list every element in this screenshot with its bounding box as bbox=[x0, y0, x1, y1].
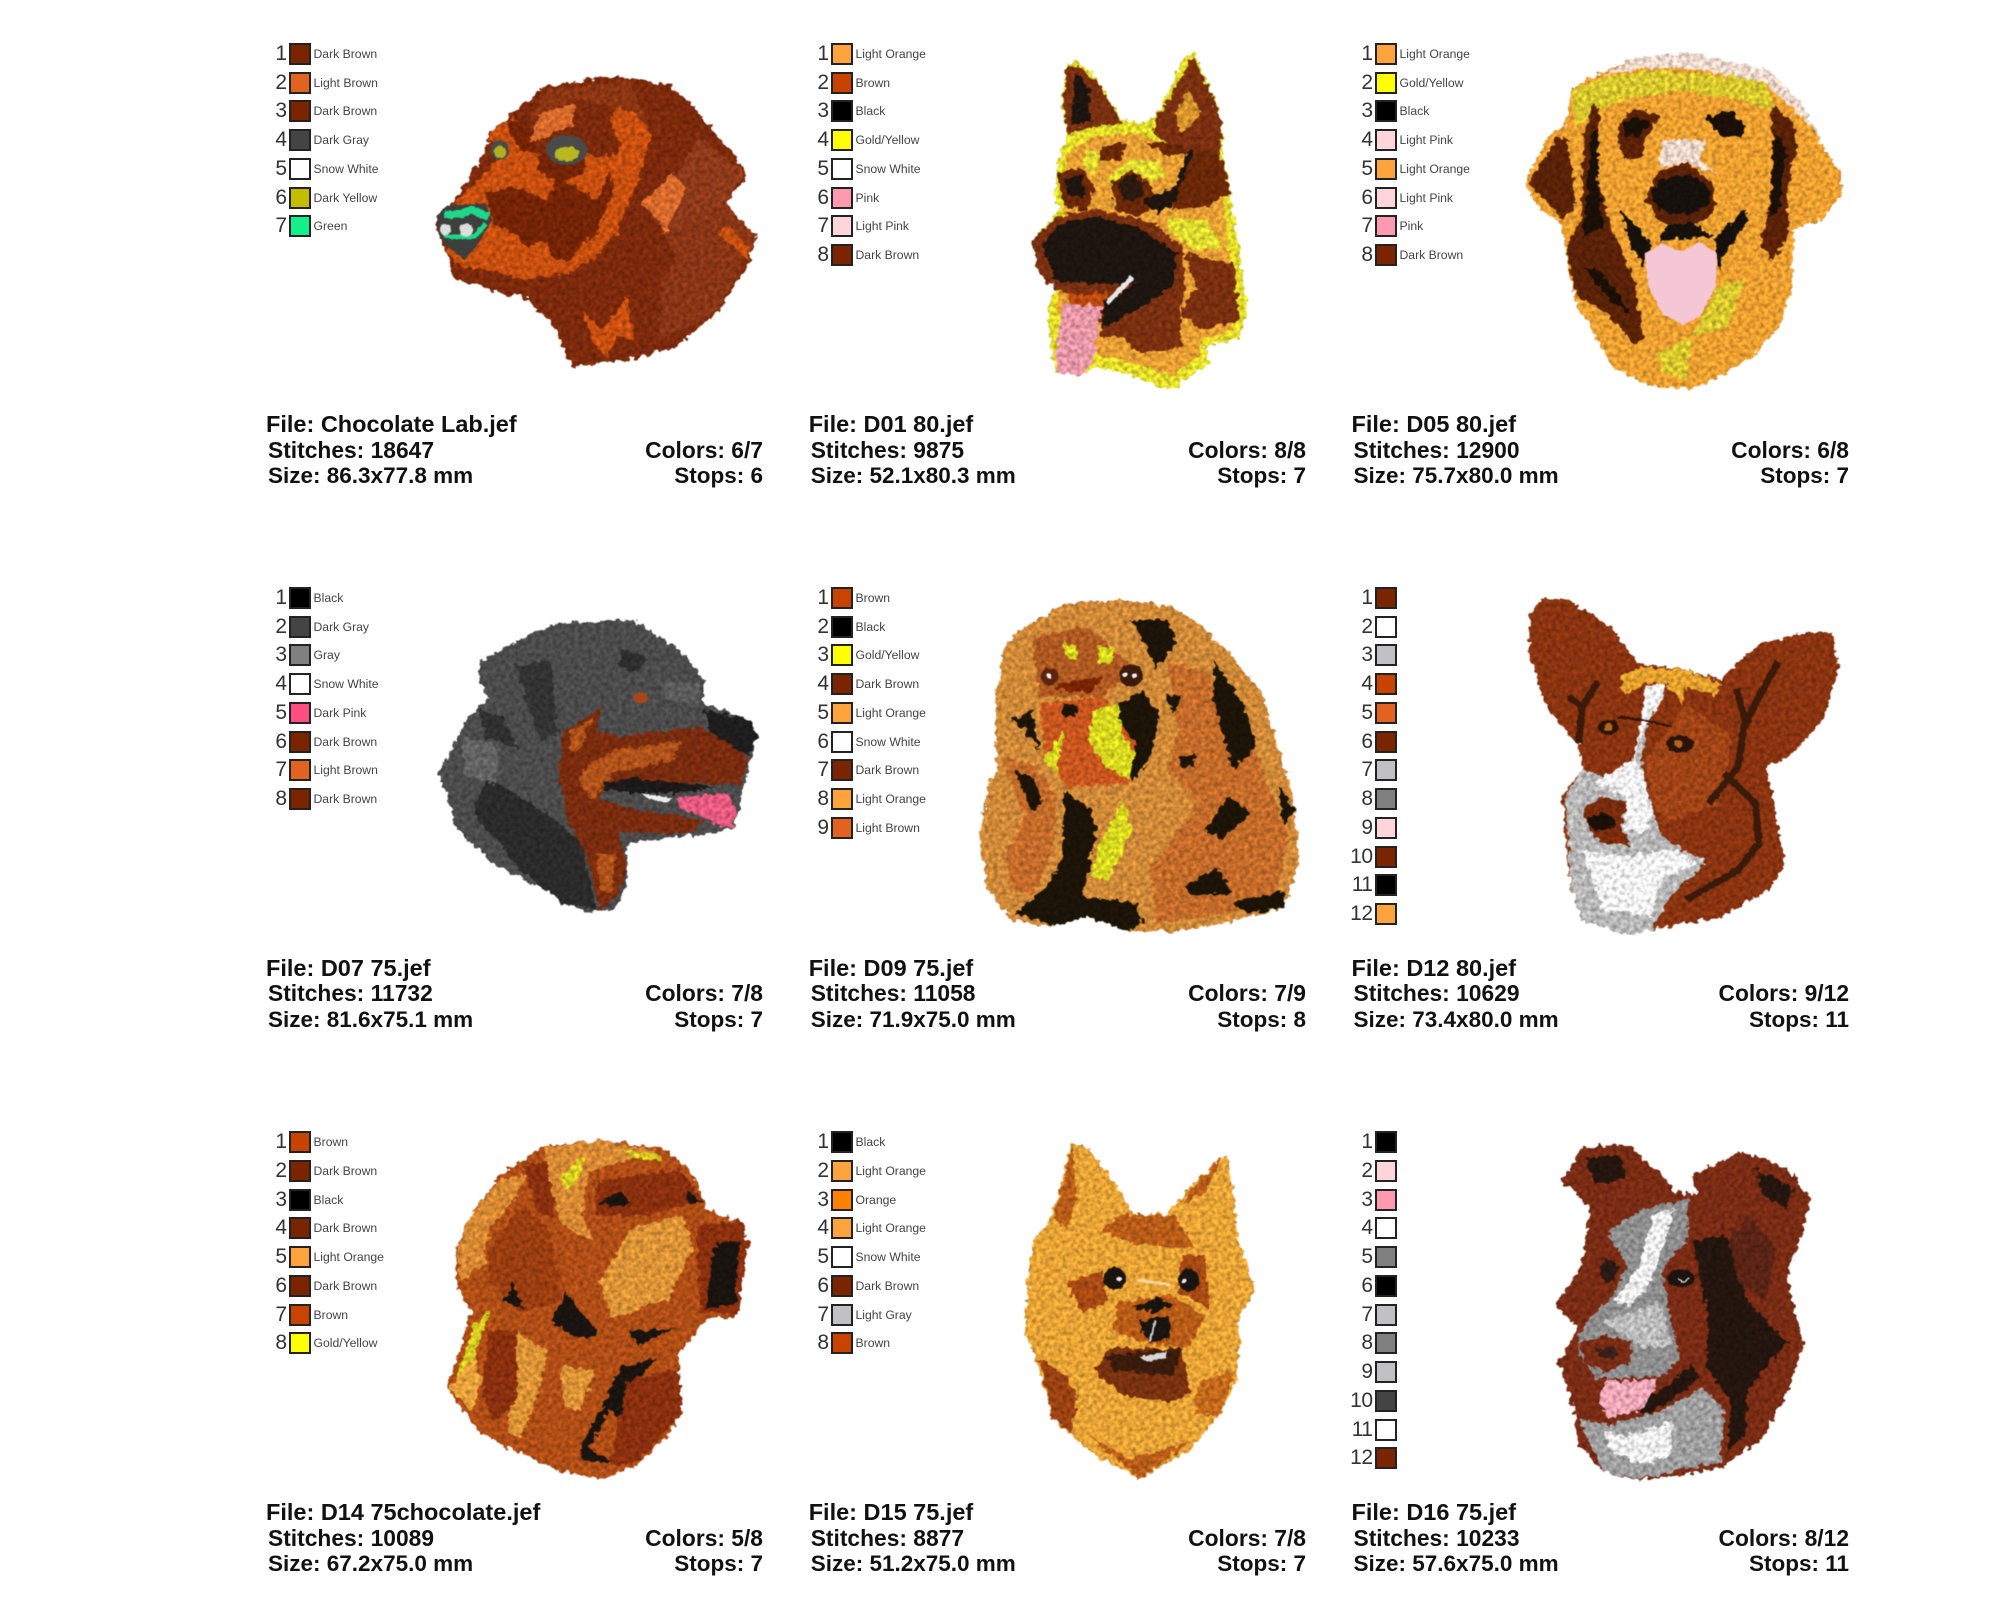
file stats: Stops: 7 bbox=[1217, 1551, 1306, 1576]
color legend: Black bbox=[314, 1193, 343, 1207]
color legend: Light Orange bbox=[856, 706, 926, 720]
color legend: Light Pink bbox=[1400, 191, 1453, 205]
file stats: File: Chocolate Lab.jef bbox=[266, 411, 517, 437]
color legend: Dark Brown bbox=[856, 763, 919, 777]
color legend: 6 bbox=[1361, 186, 1372, 209]
color legend: Gold/Yellow bbox=[1400, 76, 1463, 90]
color legend: Dark Brown bbox=[1400, 248, 1463, 262]
color legend: Gold/Yellow bbox=[314, 1336, 377, 1350]
color legend: Light Brown bbox=[314, 763, 378, 777]
color legend: Gold/Yellow bbox=[856, 133, 919, 147]
panel: D16 75 bbox=[1350, 1130, 1849, 1576]
color legend: 1 bbox=[1361, 586, 1372, 609]
embroidered dog: chocolate lab bbox=[434, 74, 758, 370]
color legend bbox=[817, 1130, 926, 1354]
color legend: Dark Brown bbox=[856, 677, 919, 691]
embroidered dog: spaniel bbox=[978, 598, 1300, 935]
color legend: 3 bbox=[275, 643, 286, 666]
file stats: Size: 51.2x75.0 mm bbox=[811, 1551, 1016, 1576]
color legend: 6 bbox=[817, 730, 828, 753]
file stats: Stitches: 11732 bbox=[268, 980, 433, 1006]
color legend: Dark Brown bbox=[856, 248, 919, 262]
color legend: 1 bbox=[817, 42, 828, 65]
embroidered dog: yorkshire terrier bbox=[1023, 1142, 1256, 1480]
color legend: Black bbox=[856, 104, 885, 118]
color legend: Black bbox=[856, 1135, 885, 1149]
color legend: 8 bbox=[817, 243, 828, 266]
color legend: Light Orange bbox=[856, 792, 926, 806]
color legend bbox=[1350, 1130, 1397, 1469]
color legend: Snow White bbox=[856, 1250, 921, 1264]
file stats: File: D12 80.jef bbox=[1352, 955, 1516, 981]
color legend: 4 bbox=[817, 1216, 828, 1239]
file stats: Colors: 6/8 bbox=[1731, 437, 1849, 463]
color legend bbox=[275, 1130, 384, 1354]
color legend: 7 bbox=[817, 214, 828, 237]
color legend: Light Orange bbox=[856, 47, 926, 61]
color legend: 7 bbox=[1361, 214, 1372, 237]
file stats: File: D09 75.jef bbox=[809, 955, 973, 981]
color legend: Dark Brown bbox=[314, 47, 377, 61]
color legend: Black bbox=[1400, 104, 1429, 118]
icon: eyes and nose bbox=[437, 135, 588, 260]
file stats: Colors: 8/8 bbox=[1188, 437, 1306, 463]
color legend: Dark Gray bbox=[314, 620, 369, 634]
file stats: Stitches: 10089 bbox=[268, 1525, 434, 1551]
panel: D09 75 bbox=[809, 586, 1306, 1032]
color legend: 4 bbox=[817, 128, 828, 151]
color legend: 6 bbox=[275, 730, 286, 753]
file stats: Size: 73.4x80.0 mm bbox=[1354, 1007, 1559, 1032]
file stats bbox=[266, 1499, 763, 1576]
file stats bbox=[266, 411, 763, 488]
file stats: Stitches: 9875 bbox=[811, 437, 964, 463]
file stats: File: D15 75.jef bbox=[809, 1499, 973, 1525]
color legend: 4 bbox=[1361, 672, 1372, 695]
color legend: 3 bbox=[817, 643, 828, 666]
color legend: 6 bbox=[817, 1274, 828, 1297]
icon: teeth bbox=[1107, 277, 1133, 303]
file stats: File: D05 80.jef bbox=[1352, 411, 1516, 437]
color legend: Dark Brown bbox=[314, 104, 377, 118]
file stats: Colors: 8/12 bbox=[1718, 1525, 1849, 1551]
icon: fur markings bbox=[1568, 662, 1778, 900]
color legend: Light Gray bbox=[856, 1308, 912, 1322]
file stats: Colors: 7/8 bbox=[645, 980, 763, 1006]
color legend: 10 bbox=[1350, 1389, 1372, 1412]
icon: tongue bbox=[1645, 242, 1717, 325]
color legend: Dark Brown bbox=[314, 792, 377, 806]
color legend bbox=[817, 586, 926, 839]
color legend: Gold/Yellow bbox=[856, 648, 919, 662]
file stats: Size: 75.7x80.0 mm bbox=[1354, 463, 1559, 488]
color legend: Snow White bbox=[856, 162, 921, 176]
color legend: Light Orange bbox=[1400, 162, 1470, 176]
color legend: Light Brown bbox=[856, 821, 920, 835]
file stats: Stitches: 10629 bbox=[1354, 980, 1520, 1006]
color legend: Light Orange bbox=[314, 1250, 384, 1264]
color legend: Gray bbox=[314, 648, 340, 662]
file stats: Stops: 11 bbox=[1749, 1551, 1849, 1576]
color legend: Dark Brown bbox=[314, 1279, 377, 1293]
color legend: 6 bbox=[1361, 1274, 1372, 1297]
color legend: 8 bbox=[275, 787, 286, 810]
color legend: 2 bbox=[275, 615, 286, 638]
color legend: 10 bbox=[1350, 845, 1372, 868]
file stats: Stops: 7 bbox=[1217, 463, 1306, 488]
file stats: Stops: 6 bbox=[674, 463, 763, 488]
file stats: Size: 86.3x77.8 mm bbox=[268, 463, 473, 488]
embroidered dog: border collie bbox=[1555, 1142, 1812, 1482]
file stats: Stops: 7 bbox=[1760, 463, 1849, 488]
color legend: Dark Brown bbox=[856, 1279, 919, 1293]
color legend: 8 bbox=[1361, 243, 1372, 266]
color legend: 3 bbox=[817, 99, 828, 122]
file stats: Stops: 8 bbox=[1217, 1007, 1306, 1032]
color legend: 8 bbox=[1361, 787, 1372, 810]
color legend: 5 bbox=[1361, 701, 1372, 724]
color legend: 2 bbox=[817, 615, 828, 638]
color legend: 1 bbox=[817, 586, 828, 609]
color legend: Dark Brown bbox=[314, 1221, 377, 1235]
file stats: Stitches: 18647 bbox=[268, 437, 434, 463]
embroidered dog: rottweiler bbox=[436, 618, 760, 914]
panel: D05 80 bbox=[1352, 42, 1849, 488]
color legend: 5 bbox=[817, 1245, 828, 1268]
file stats: Size: 81.6x75.1 mm bbox=[268, 1007, 473, 1032]
color legend: 9 bbox=[1361, 816, 1372, 839]
icon: eyes bbox=[1598, 717, 1694, 753]
icon: eyes bbox=[1041, 664, 1143, 687]
file stats: Stops: 7 bbox=[674, 1551, 763, 1576]
color legend bbox=[275, 42, 379, 237]
color legend: Black bbox=[856, 620, 885, 634]
color legend: Light Pink bbox=[1400, 133, 1453, 147]
color legend: 7 bbox=[275, 214, 286, 237]
color legend: 3 bbox=[1361, 643, 1372, 666]
color legend: 9 bbox=[817, 816, 828, 839]
color legend: 3 bbox=[275, 1188, 286, 1211]
color legend: 2 bbox=[275, 1159, 286, 1182]
color legend: 1 bbox=[275, 42, 286, 65]
color legend bbox=[275, 586, 379, 810]
file stats: Size: 71.9x75.0 mm bbox=[811, 1007, 1016, 1032]
color legend: 8 bbox=[275, 1331, 286, 1354]
color legend: 2 bbox=[275, 71, 286, 94]
color legend: 2 bbox=[817, 71, 828, 94]
color legend: 12 bbox=[1350, 1446, 1372, 1469]
file stats bbox=[1352, 1499, 1849, 1576]
color legend bbox=[817, 42, 926, 266]
color legend: 7 bbox=[275, 758, 286, 781]
color legend: 5 bbox=[817, 701, 828, 724]
color legend: 6 bbox=[275, 1274, 286, 1297]
file stats bbox=[266, 955, 763, 1032]
color legend: 5 bbox=[275, 701, 286, 724]
file stats: Colors: 6/7 bbox=[645, 437, 763, 463]
color legend: 4 bbox=[275, 128, 286, 151]
color legend: 8 bbox=[1361, 1331, 1372, 1354]
file stats: File: D01 80.jef bbox=[809, 411, 973, 437]
color legend: 1 bbox=[1361, 42, 1372, 65]
color legend: 12 bbox=[1350, 902, 1372, 925]
file stats bbox=[1352, 955, 1849, 1032]
panel: Chocolate Lab bbox=[266, 42, 763, 488]
color legend: Brown bbox=[314, 1135, 348, 1149]
file stats: File: D07 75.jef bbox=[266, 955, 431, 981]
file stats: Stops: 11 bbox=[1749, 1007, 1849, 1032]
color legend: Brown bbox=[314, 1308, 348, 1322]
color legend bbox=[1361, 42, 1470, 266]
color legend: 4 bbox=[817, 672, 828, 695]
color legend: Snow White bbox=[856, 735, 921, 749]
color legend: Snow White bbox=[314, 677, 379, 691]
color legend: 1 bbox=[1361, 1130, 1372, 1153]
file stats: Stitches: 12900 bbox=[1354, 437, 1520, 463]
color legend: 8 bbox=[817, 1331, 828, 1354]
color legend: Dark Yellow bbox=[314, 191, 377, 205]
color legend: Pink bbox=[856, 191, 879, 205]
file stats: Size: 67.2x75.0 mm bbox=[268, 1551, 473, 1576]
color legend: Light Orange bbox=[856, 1221, 926, 1235]
file stats bbox=[809, 1499, 1306, 1576]
file stats: Colors: 7/8 bbox=[1188, 1525, 1306, 1551]
embroidered dog: golden retriever bbox=[1525, 52, 1844, 392]
color legend: Light Brown bbox=[314, 76, 378, 90]
embroidered dog: corgi bbox=[1526, 596, 1841, 936]
file stats: Stitches: 8877 bbox=[811, 1525, 964, 1551]
color legend: 1 bbox=[817, 1130, 828, 1153]
color legend: 1 bbox=[275, 1130, 286, 1153]
file stats: Colors: 5/8 bbox=[645, 1525, 763, 1551]
color legend: 3 bbox=[817, 1188, 828, 1211]
color legend: 5 bbox=[1361, 1245, 1372, 1268]
color legend: 8 bbox=[817, 787, 828, 810]
color legend: 5 bbox=[817, 157, 828, 180]
icon: teeth and eye bbox=[633, 693, 672, 803]
color legend: 5 bbox=[1361, 157, 1372, 180]
color legend: Dark Pink bbox=[314, 706, 366, 720]
file stats: Stops: 7 bbox=[674, 1007, 763, 1032]
file stats: Colors: 7/9 bbox=[1188, 980, 1306, 1006]
color legend: 3 bbox=[1361, 1188, 1372, 1211]
color legend: 5 bbox=[275, 157, 286, 180]
color legend: Brown bbox=[856, 1336, 890, 1350]
file stats: Size: 57.6x75.0 mm bbox=[1354, 1551, 1559, 1576]
panel: D14 75chocolate bbox=[266, 1130, 763, 1576]
color legend: 2 bbox=[1361, 615, 1372, 638]
color legend bbox=[1350, 586, 1397, 925]
color legend: Dark Brown bbox=[314, 735, 377, 749]
color legend: Dark Gray bbox=[314, 133, 369, 147]
color legend: 2 bbox=[1361, 71, 1372, 94]
color legend: 7 bbox=[1361, 758, 1372, 781]
color legend: 9 bbox=[1361, 1360, 1372, 1383]
color legend: 7 bbox=[275, 1303, 286, 1326]
icon: eye bbox=[1667, 1270, 1695, 1287]
color legend: Light Orange bbox=[1400, 47, 1470, 61]
file stats: Colors: 9/12 bbox=[1718, 980, 1849, 1006]
color legend: 6 bbox=[817, 186, 828, 209]
file stats: Stitches: 10233 bbox=[1354, 1525, 1520, 1551]
file stats: Stitches: 11058 bbox=[811, 980, 975, 1006]
color legend: Black bbox=[314, 591, 343, 605]
file stats: Size: 52.1x80.3 mm bbox=[811, 463, 1016, 488]
color legend: 7 bbox=[1361, 1303, 1372, 1326]
color legend: Brown bbox=[856, 591, 890, 605]
color legend: Light Pink bbox=[856, 219, 909, 233]
color legend: Green bbox=[314, 219, 347, 233]
color legend: 3 bbox=[275, 99, 286, 122]
color legend: Pink bbox=[1400, 219, 1423, 233]
panel: D01 80 bbox=[809, 42, 1306, 488]
color legend: 7 bbox=[817, 758, 828, 781]
panel: D15 75 bbox=[809, 1130, 1306, 1576]
color legend: 11 bbox=[1352, 873, 1372, 896]
file stats: File: D14 75chocolate.jef bbox=[266, 1499, 540, 1525]
color legend: 4 bbox=[1361, 1216, 1372, 1239]
color legend: 6 bbox=[1361, 730, 1372, 753]
color legend: 2 bbox=[1361, 1159, 1372, 1182]
color legend: 2 bbox=[817, 1159, 828, 1182]
panel: D07 75 bbox=[266, 586, 763, 1032]
color legend: Snow White bbox=[314, 162, 379, 176]
color legend: 6 bbox=[275, 186, 286, 209]
color legend: 4 bbox=[275, 672, 286, 695]
color legend: 11 bbox=[1352, 1418, 1372, 1441]
file stats bbox=[809, 955, 1306, 1032]
color legend: 4 bbox=[275, 1216, 286, 1239]
color legend: 1 bbox=[275, 586, 286, 609]
color legend: 3 bbox=[1361, 99, 1372, 122]
panel: D12 80 bbox=[1350, 586, 1849, 1032]
file stats bbox=[809, 411, 1306, 488]
color legend: Light Orange bbox=[856, 1164, 926, 1178]
embroidered dog: german shepherd bbox=[1030, 50, 1250, 390]
color legend: 4 bbox=[1361, 128, 1372, 151]
icon: eyes, nose and teeth bbox=[1104, 1267, 1199, 1362]
embroidered dog: chocolate lab 2 bbox=[446, 1138, 752, 1480]
color legend: Dark Brown bbox=[314, 1164, 377, 1178]
color legend: 7 bbox=[817, 1303, 828, 1326]
file stats bbox=[1352, 411, 1849, 488]
color legend: 5 bbox=[275, 1245, 286, 1268]
color legend: Brown bbox=[856, 76, 890, 90]
file stats: File: D16 75.jef bbox=[1352, 1499, 1516, 1525]
color legend: Orange bbox=[856, 1193, 896, 1207]
